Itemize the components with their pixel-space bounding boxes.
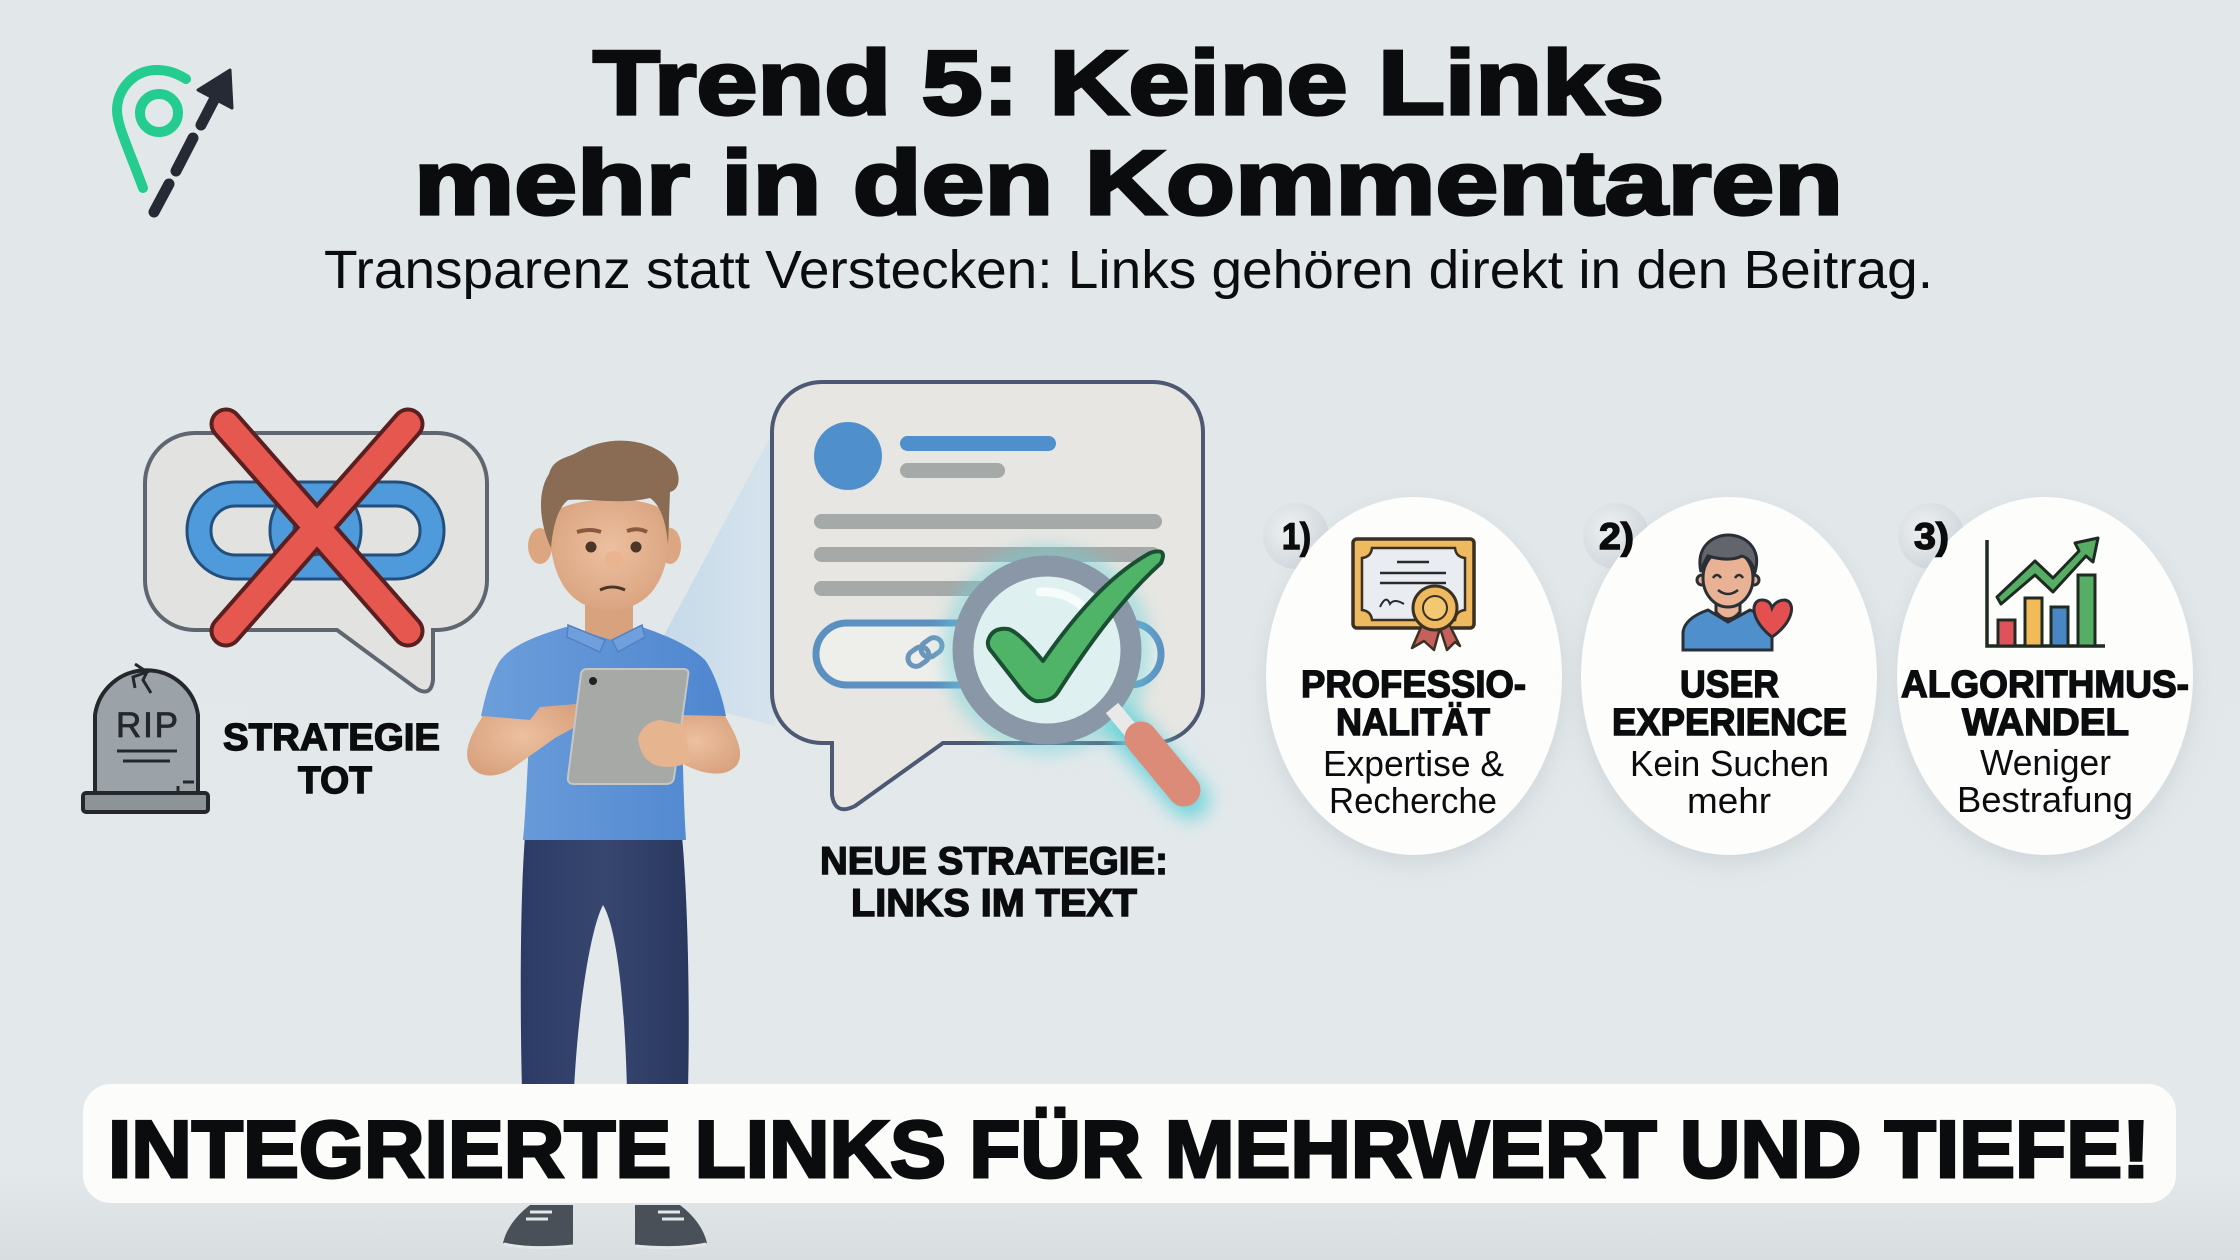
panel: new strategy, post bubble with magnifier [772,382,1203,809]
figure: man with tablet [467,441,740,1248]
badge disc 3 [1898,503,1964,569]
link field [816,623,1161,685]
speech bubble [145,433,487,692]
text [1901,664,2189,820]
text: Weniger [1980,742,2111,783]
subtitle: Transparenz statt Verstecken: Links gehören direkt in den Beitrag. [324,240,1933,300]
text: ALGORITHMUS- [1901,664,2189,706]
badge disc 1 [1263,503,1329,569]
icon: tombstone RIP [83,664,208,812]
oval 1 [1263,497,1562,863]
shoes [503,1205,707,1248]
label: strategie tot [223,717,440,802]
ovals: three reasons [1263,497,2193,863]
icon: bar chart with rising arrow [1987,538,2105,646]
text: Recherche [1329,780,1497,821]
shirt [481,627,726,840]
text [1301,664,1526,821]
bottom banner: INTEGRIERTE LINKS FÜR MEHRWERT UND TIEFE! [108,1105,2150,1195]
facial features [577,529,647,590]
text: Bestrafung [1957,779,2133,820]
oval 3 [1897,497,2193,863]
ears [528,528,681,564]
label: strategie tot: STRATEGIE [223,717,440,759]
hand on tablet [638,720,690,767]
left arm [467,704,577,775]
text: EXPERIENCE [1612,702,1847,744]
face [550,499,669,610]
icon: tombstone RIP: RIP [116,706,178,745]
title: mehr in den Kommentaren [414,133,1843,234]
badge number 1: 1) [1282,516,1311,557]
tablet [568,669,688,784]
label: neue strategie: LINKS IM TEXT [851,882,1137,925]
title: Trend 5: Keine Links [593,33,1664,134]
neck [585,595,633,640]
badge number 3: 3) [1914,516,1949,557]
text: Kein Suchen [1630,743,1829,784]
label: neue strategie [820,840,1168,925]
icon: certificate [1353,539,1474,650]
collar [567,625,645,652]
icon: red cross [226,424,408,631]
icon: magnifying glass with check [953,551,1190,800]
badge number 2: 2) [1599,516,1634,557]
badge disc 2 [1583,503,1649,569]
text: mehr [1687,780,1771,821]
light cone from tablet to bubble [663,428,775,726]
label: neue strategie: NEUE STRATEGIE: [820,840,1168,883]
icon: logo pin with dashed arrow [117,70,232,212]
panel: old strategy, speech bubble with crossed link [145,424,487,692]
speech bubble post [772,382,1203,809]
oval 2 [1581,497,1877,863]
right arm [650,715,740,774]
trousers [521,836,689,1090]
text: PROFESSIO- [1301,664,1526,706]
icon: happy user with heart [1683,535,1792,650]
label: strategie tot: TOT [298,760,372,802]
text: NALITÄT [1336,701,1490,744]
text: Expertise & [1323,743,1504,784]
icon: chain link [199,494,432,567]
avatar dot [814,422,882,490]
text: WANDEL [1962,702,2129,744]
hair [541,441,679,548]
placeholder lines [814,436,1162,596]
text [1612,664,1847,821]
title [414,33,1843,234]
text: USER [1680,664,1779,706]
